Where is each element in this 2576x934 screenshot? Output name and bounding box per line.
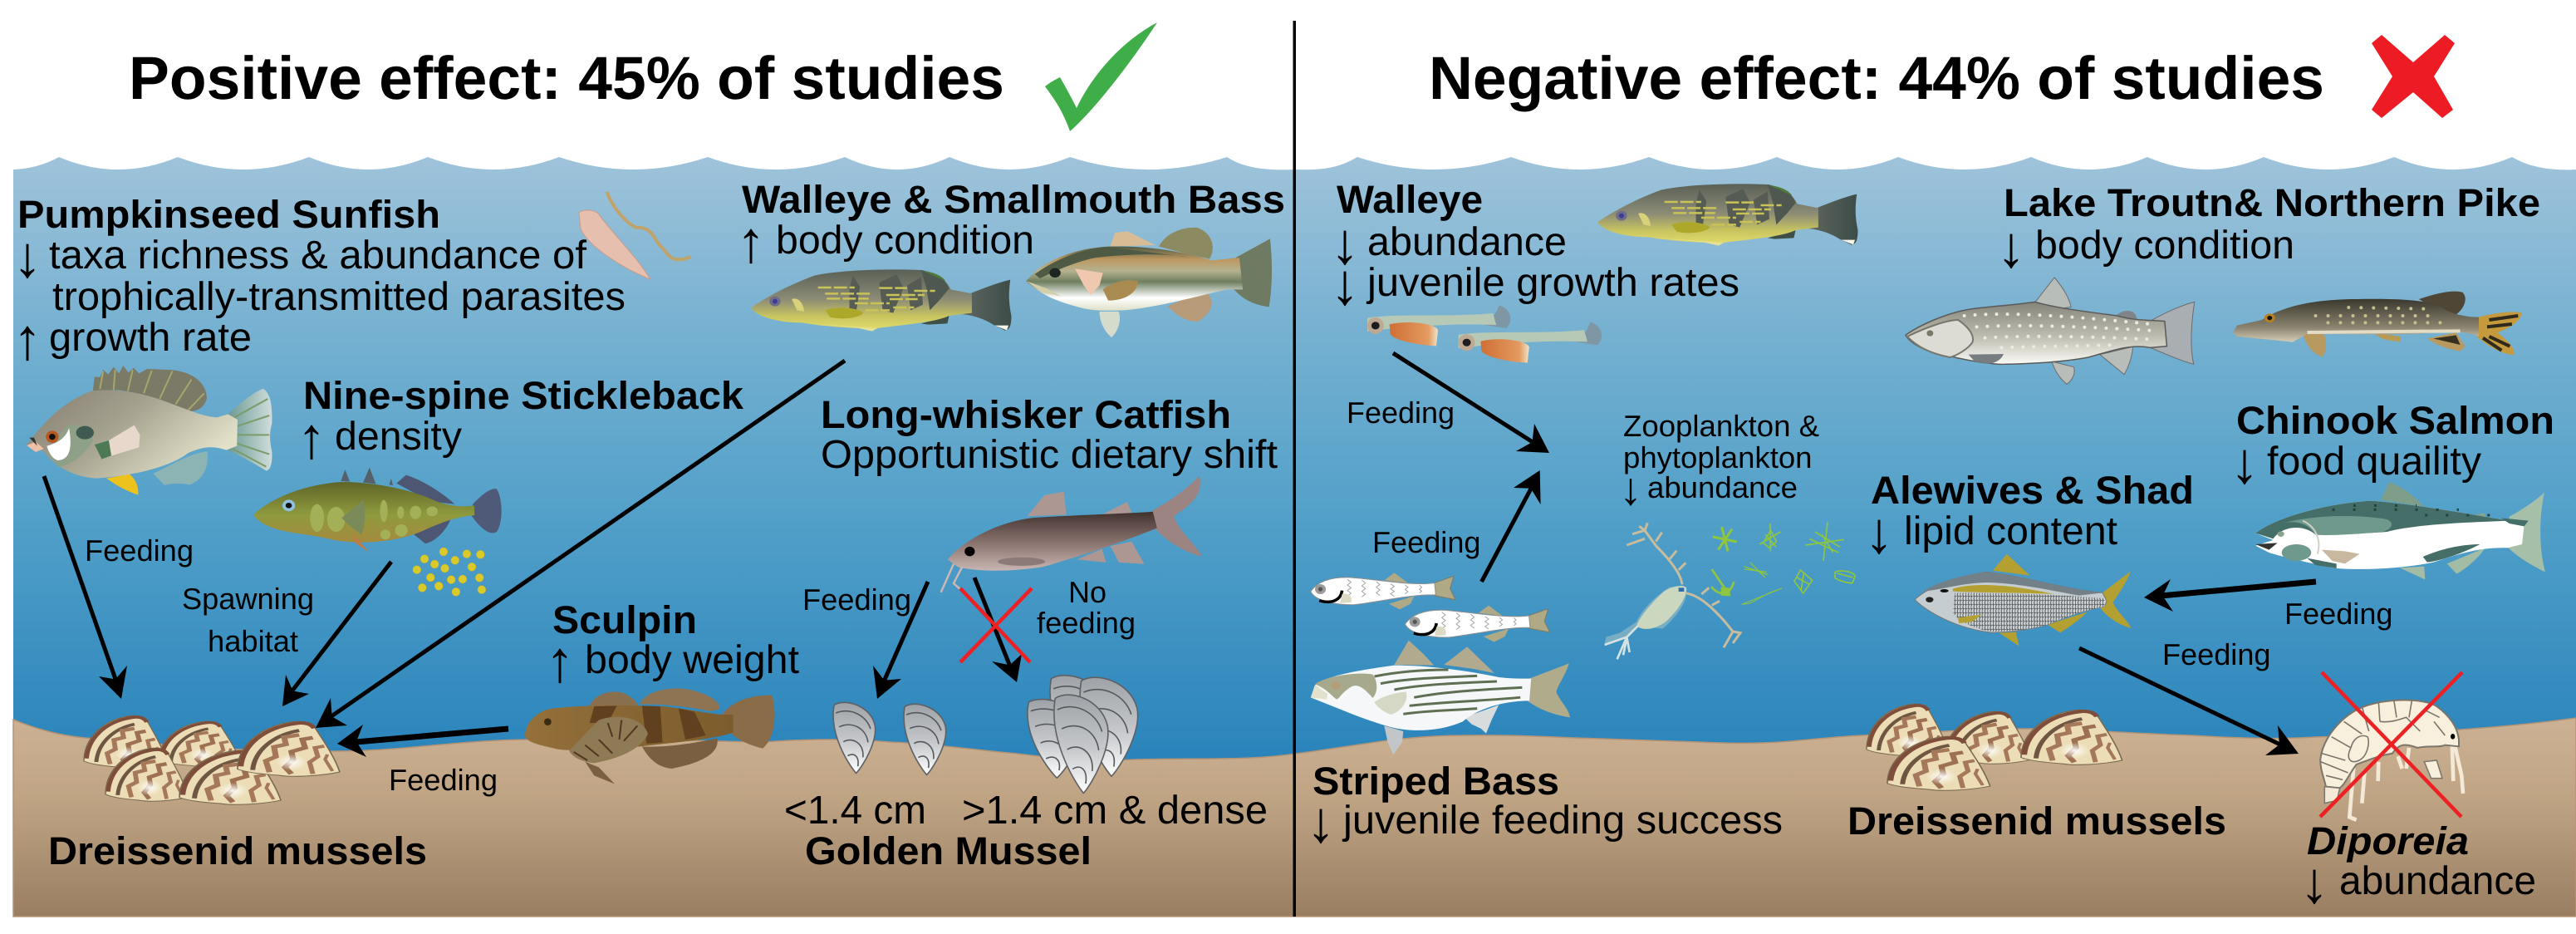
label: no feeding: No bbox=[1068, 575, 1106, 609]
text: Pumpkinseed Sunfish: taxa richness & abundance of bbox=[49, 234, 587, 278]
heading: negative effect: Negative effect: 44% of studies bbox=[1429, 45, 2324, 112]
icon: northern pike bbox=[2233, 292, 2522, 356]
icon: stickleback fish bbox=[254, 468, 502, 553]
label: no feeding: feeding bbox=[1037, 606, 1136, 640]
text: Alewives and Shad: ↓ bbox=[1864, 500, 1894, 565]
text: Lake Trout and Northern Pike: Lake Troutn& Northern Pike bbox=[2004, 180, 2540, 224]
icon: eggs bbox=[413, 548, 486, 596]
text: Nine-spine Stickleback: ↑ bbox=[297, 406, 326, 470]
icon: chinook salmon bbox=[2255, 482, 2545, 579]
text: Chinook Salmon: food quaility bbox=[2267, 440, 2481, 484]
text: Sculpin: body weight bbox=[585, 638, 799, 682]
text: Long-whisker Catfish: Long-whisker Catfish bbox=[821, 392, 1231, 436]
label: spawning habitat bbox=[182, 582, 314, 658]
text: zooplankton and phytoplankton: abundance bbox=[1647, 470, 1798, 504]
text: Sculpin bbox=[545, 597, 799, 694]
text: Diporeia: Diporeia bbox=[2307, 818, 2469, 863]
arrow: alewives feeding on diporeia bbox=[2079, 648, 2299, 755]
text: zooplankton and phytoplankton bbox=[1619, 409, 1819, 514]
arrow: salmon feeding on alewives bbox=[2144, 579, 2316, 612]
divider between panels bbox=[1293, 21, 1296, 917]
icon: pumpkinseed sunfish bbox=[26, 366, 272, 495]
text: Long-whisker Catfish bbox=[821, 392, 1278, 477]
text: Diporeia: abundance bbox=[2339, 859, 2536, 903]
icon: dreissenid mussels right bbox=[1867, 704, 2122, 790]
icon: red cross bbox=[2372, 35, 2455, 118]
text: Striped Bass: Striped Bass bbox=[1313, 759, 1559, 803]
label: spawning habitat: Spawning bbox=[182, 582, 314, 616]
icon: Diporeia amphipod bbox=[2320, 700, 2463, 820]
text: Sculpin: Sculpin bbox=[552, 597, 697, 642]
text: Lake Trout and Northern Pike bbox=[1997, 180, 2540, 279]
label: Dreissenid mussels right: Dreissenid mussels bbox=[1847, 799, 2226, 843]
label: feeding walleye: Feeding bbox=[1347, 396, 1455, 430]
text: Pumpkinseed Sunfish: ↑ bbox=[13, 307, 42, 371]
icon: juvenile fish bbox=[1367, 305, 1602, 363]
label: feeding sunfish: Feeding bbox=[85, 533, 194, 568]
icon: sculpin fish bbox=[525, 689, 774, 784]
text: Nine-spine Stickleback bbox=[297, 373, 744, 470]
text: Alewives and Shad: Alewives & Shad bbox=[1871, 468, 2194, 512]
arrow: stickleback spawning habitat bbox=[282, 562, 391, 706]
label: feeding salmon: Feeding bbox=[2284, 597, 2392, 631]
text: Pumpkinseed Sunfish: growth rate bbox=[49, 316, 252, 360]
icon: parasites bbox=[579, 192, 691, 279]
text: Walleye and Smallmouth Bass bbox=[736, 177, 1285, 274]
text: Walleye and Smallmouth Bass: ↑ bbox=[736, 209, 766, 274]
icon: phytoplankton bbox=[1711, 522, 1855, 604]
arrow: walleye juveniles feeding on plankton bbox=[1393, 353, 1549, 453]
label: mussel size small: <1.4 cm bbox=[784, 789, 926, 833]
text: Pumpkinseed Sunfish: ↓ bbox=[13, 224, 42, 289]
panel: lake-bed sediment bbox=[13, 718, 2576, 917]
icon: alewife fish bbox=[1915, 554, 2131, 646]
panel: lake water bbox=[13, 157, 2576, 831]
text: Walleye negative: ↓ bbox=[1331, 211, 1359, 276]
text: Alewives and Shad bbox=[1864, 468, 2194, 565]
text: Walleye negative: ↓ bbox=[1331, 252, 1359, 317]
icon: dreissenid mussels left bbox=[84, 715, 340, 804]
text: Walleye negative: Walleye bbox=[1337, 177, 1483, 221]
text: Pumpkinseed Sunfish: Pumpkinseed Sunfish bbox=[17, 192, 440, 236]
icon: striped bass bbox=[1311, 641, 1570, 755]
text: Sculpin: ↑ bbox=[545, 629, 575, 694]
text: Diporeia: ↓ bbox=[2299, 850, 2329, 915]
text: Striped Bass: juvenile feeding success bbox=[1342, 799, 1783, 843]
text: Walleye negative: juvenile growth rates bbox=[1366, 261, 1739, 305]
text: Chinook Salmon: ↓ bbox=[2230, 430, 2260, 495]
label: mussel size large: >1.4 cm & dense bbox=[962, 789, 1268, 833]
text: Diporeia bbox=[2299, 818, 2536, 915]
text: Long-whisker Catfish: Opportunistic dietary shift bbox=[821, 433, 1278, 477]
icon: catfish bbox=[941, 476, 1202, 592]
text: Alewives and Shad: lipid content bbox=[1904, 509, 2117, 553]
icon: walleye fish bbox=[752, 269, 1011, 332]
text: Lake Trout and Northern Pike: body condition bbox=[2035, 224, 2294, 268]
icon: small white fish pair bbox=[1311, 573, 1550, 642]
icon: red cross over no feeding bbox=[960, 588, 1032, 662]
icon: golden mussels small bbox=[833, 702, 946, 774]
label: feeding catfish: Feeding bbox=[802, 583, 911, 617]
arrow: sculpin feeding bbox=[337, 725, 508, 757]
arrow: catfish not feeding on large mussels bbox=[974, 578, 1022, 682]
label: Golden Mussel: Golden Mussel bbox=[805, 828, 1092, 873]
text: Pumpkinseed Sunfish: trophically-transmitted parasites bbox=[52, 275, 626, 319]
text: Walleye negative: abundance bbox=[1367, 220, 1567, 264]
label: Dreissenid mussels left: Dreissenid mussels bbox=[48, 828, 427, 873]
label: spawning habitat: habitat bbox=[208, 624, 298, 658]
icon: smallmouth bass bbox=[1026, 228, 1272, 337]
label: feeding alewives: Feeding bbox=[2162, 637, 2271, 671]
arrow: small fish feeding on plankton bbox=[1482, 470, 1541, 582]
text: Chinook Salmon: Chinook Salmon bbox=[2236, 398, 2554, 442]
text: Walleye and Smallmouth Bass: body condition bbox=[776, 219, 1034, 263]
text: Lake Trout and Northern Pike: ↓ bbox=[1997, 214, 2025, 279]
text: zooplankton and phytoplankton: phytoplankton bbox=[1623, 440, 1813, 474]
arrow: sunfish feeding on mussels bbox=[44, 476, 127, 699]
icon: zooplankton copepod bbox=[1605, 523, 1740, 659]
icon: lake trout bbox=[1906, 278, 2195, 384]
text: Nine-spine Stickleback: Nine-spine Stickleback bbox=[303, 373, 744, 417]
text: zooplankton and phytoplankton: Zooplankton & bbox=[1623, 409, 1819, 443]
arrow: catfish feeding on small mussels bbox=[873, 582, 928, 699]
text: Chinook Salmon bbox=[2230, 398, 2554, 495]
text: Striped Bass bbox=[1306, 759, 1783, 854]
text: Walleye negative bbox=[1331, 177, 1739, 317]
text: zooplankton and phytoplankton: ↓ bbox=[1619, 463, 1642, 514]
text: Striped Bass: ↓ bbox=[1306, 789, 1336, 854]
text: Walleye and Smallmouth Bass: Walleye & Smallmouth Bass bbox=[742, 177, 1285, 221]
label: feeding sculpin: Feeding bbox=[389, 763, 498, 797]
icon: green check mark bbox=[1045, 22, 1157, 131]
icon: golden mussel cluster bbox=[1028, 676, 1138, 793]
icon: walleye fish right bbox=[1598, 184, 1857, 246]
label: no feeding bbox=[1037, 575, 1136, 640]
icon: red cross over Diporeia bbox=[2320, 672, 2462, 817]
text: Pumpkinseed Sunfish bbox=[13, 192, 626, 371]
heading: positive effect: Positive effect: 45% of studies bbox=[129, 45, 1004, 112]
text: Nine-spine Stickleback: density bbox=[335, 415, 462, 459]
arrow: walleye and bass to mussels bbox=[316, 361, 845, 728]
label: feeding small fish: Feeding bbox=[1372, 525, 1480, 559]
